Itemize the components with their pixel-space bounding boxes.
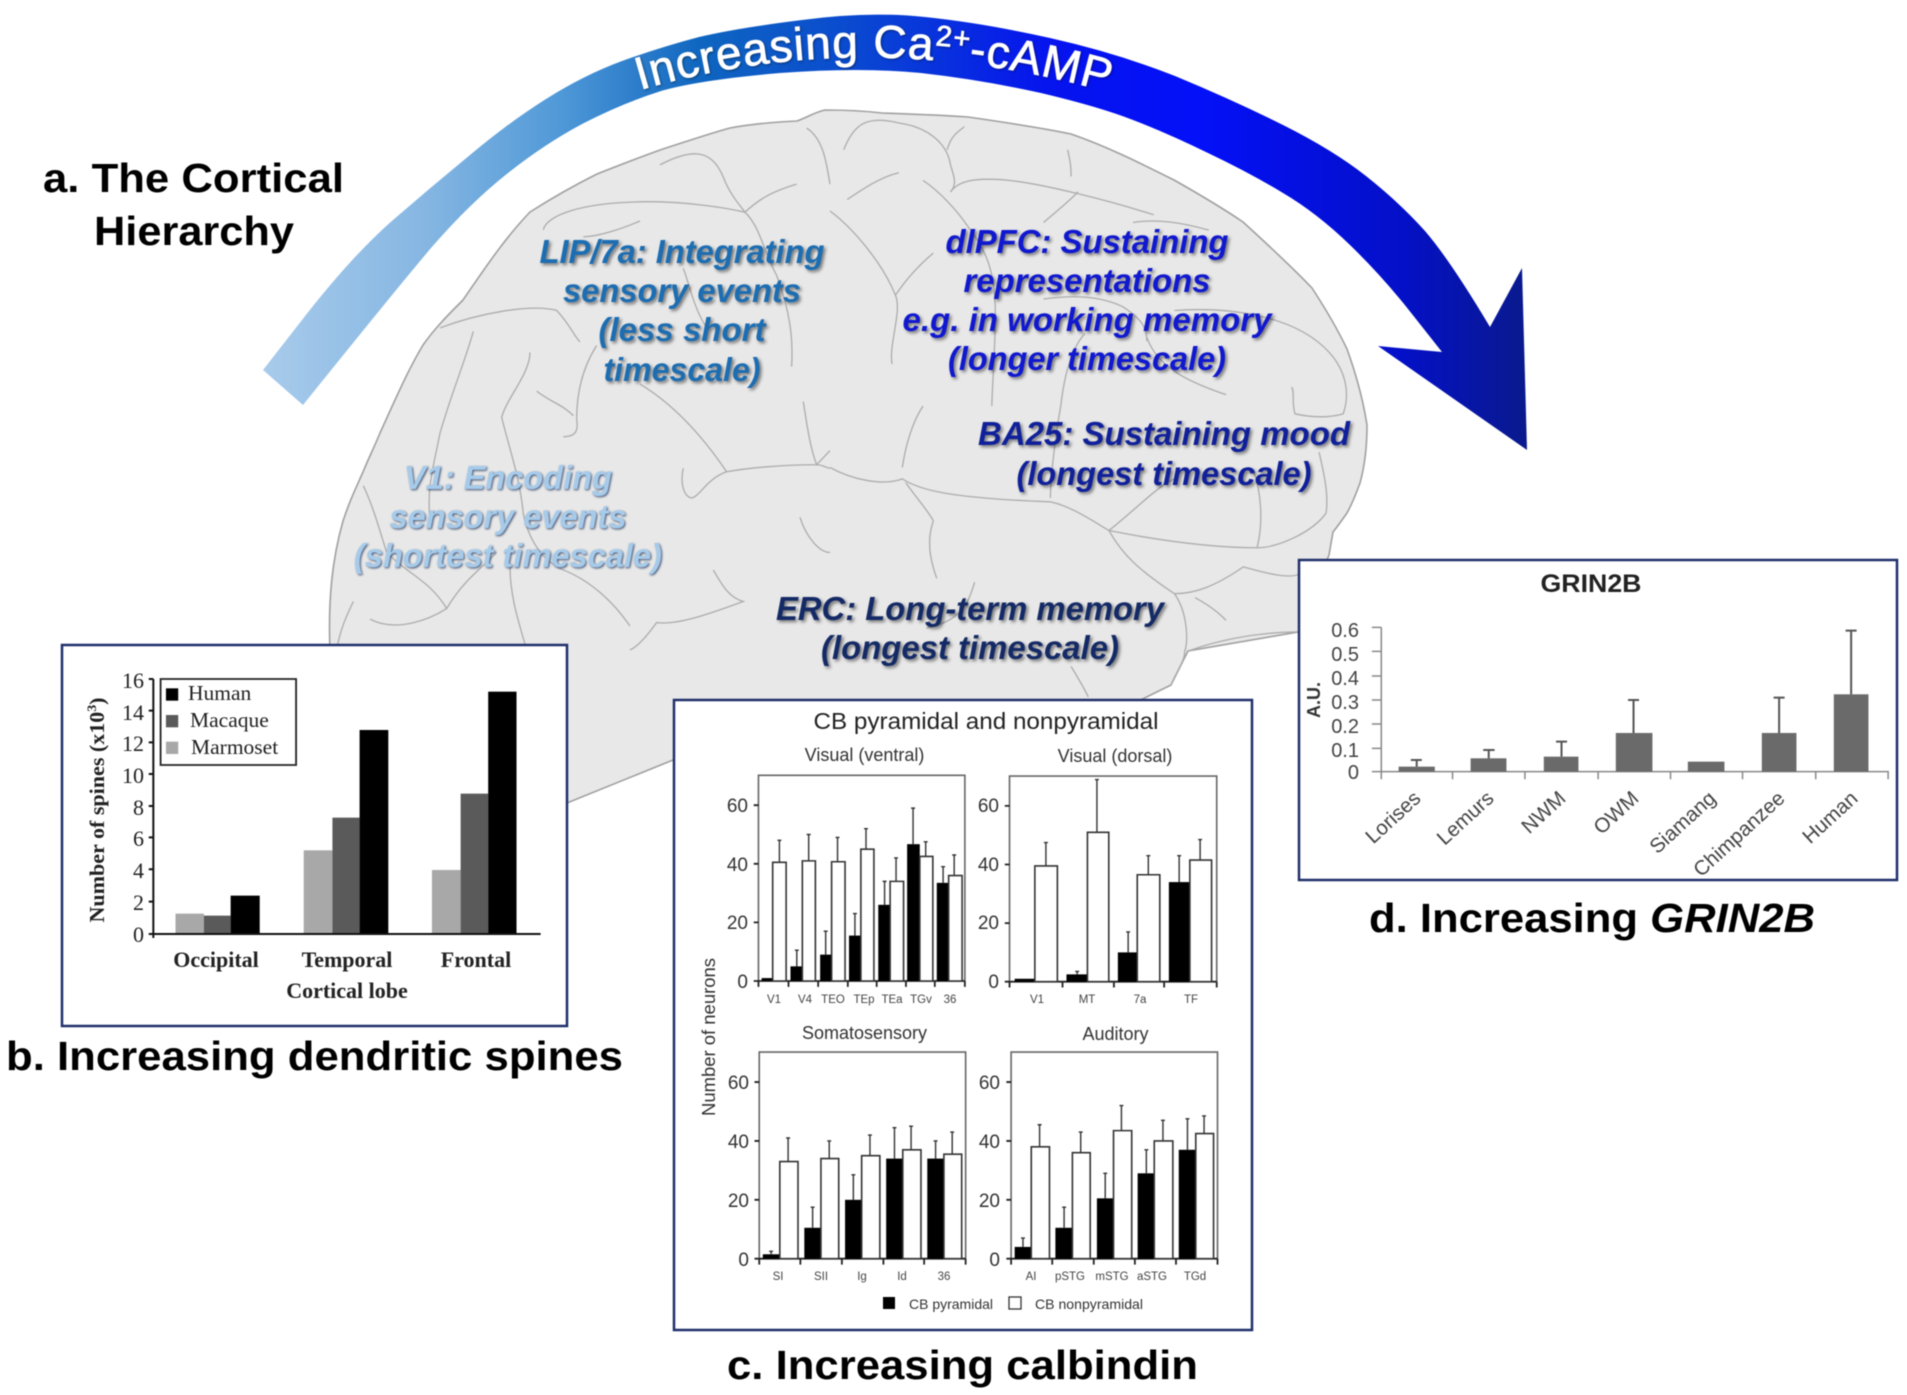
- heading a: Hierarchy: [94, 208, 294, 254]
- subplot: auditory: aSTG: [1137, 1271, 1167, 1283]
- legend and axis text: Human: [188, 681, 252, 705]
- legend and axis text: Number of spines (x10: [85, 722, 109, 922]
- legend and axis text: [84, 668, 511, 1003]
- brain label: dlPFC: dlPFC: Sustaining: [946, 223, 1228, 260]
- legend and axis text: 6: [133, 826, 144, 851]
- brain label: BA25: BA25: Sustaining mood: [978, 415, 1351, 452]
- subplot: auditory: 0: [989, 1250, 1000, 1271]
- y axis labels: 0.5: [1331, 644, 1359, 666]
- subplot: visual dorsal: TF: [1184, 994, 1198, 1006]
- legend and axis text: 12: [122, 731, 144, 756]
- subplot: visual dorsal: 7a: [1134, 994, 1147, 1006]
- y-axis title: Number of neurons: [699, 958, 719, 1116]
- category labels: Siamang: [1645, 787, 1720, 858]
- legend and axis text: Temporal: [302, 947, 392, 972]
- legend and axis text: Macaque: [190, 708, 269, 732]
- category labels: OWM: [1589, 787, 1643, 839]
- legend and axis text: 14: [122, 700, 144, 725]
- brain label: LIP/7a: timescale): [604, 351, 760, 388]
- legend: CB cell types: [883, 1296, 1143, 1312]
- panel b: dendritic spines chart: [62, 645, 567, 1026]
- legend and axis text: 10: [122, 763, 144, 788]
- bars with error bars: [1372, 627, 1889, 779]
- bars: spines per lobe and species: [149, 679, 541, 938]
- brain label: dlPFC: e.g. in working memory: [902, 301, 1273, 338]
- y axis labels: 0.6: [1331, 620, 1359, 642]
- legend and axis text: 4: [133, 858, 144, 883]
- brain label: V1: (shortest timescale): [354, 537, 662, 574]
- subplot: visual ventral: TEO: [821, 994, 845, 1006]
- brain sulci, anterior: [830, 120, 1346, 697]
- legend and axis text: ): [85, 698, 109, 705]
- subplot: visual ventral: V4: [798, 994, 813, 1006]
- heading c: c. Increasing calbindin: [727, 1342, 1198, 1388]
- category labels: Human: [1798, 787, 1862, 848]
- y axis labels: A.U.: [1304, 682, 1324, 718]
- brain label: ERC: ERC: Long-term memory: [776, 590, 1166, 627]
- subplot: somatosensory: Ig: [857, 1271, 867, 1283]
- brain label: LIP/7a: [540, 233, 824, 388]
- category labels: [1361, 787, 1862, 881]
- arrow label: Increasing Ca: [634, 24, 936, 92]
- legend: CB cell types: CB nonpyramidal: [1035, 1296, 1143, 1312]
- brain sulci, posterior: [337, 128, 830, 650]
- subplot: auditory: Auditory: [1082, 1024, 1149, 1044]
- legend and axis text: 2: [133, 890, 144, 915]
- subplot: somatosensory: SI: [773, 1271, 783, 1283]
- legend and axis text: 0: [133, 922, 144, 947]
- subplot: somatosensory: Id: [897, 1271, 907, 1283]
- subplot: visual ventral: 0: [737, 972, 748, 993]
- chart title: CB pyramidal and nonpyramidal: [814, 708, 1158, 734]
- subplot: visual ventral: TGv: [910, 994, 932, 1006]
- subplot: somatosensory: 0: [738, 1250, 749, 1271]
- brain label: dlPFC: (longer timescale): [948, 340, 1226, 377]
- subplot: visual dorsal: Visual (dorsal): [1058, 746, 1172, 766]
- heading d: d. Increasing GRIN2B: [1369, 895, 1815, 941]
- legend and axis text: Cortical lobe: [286, 978, 408, 1003]
- brain label: dlPFC: [902, 223, 1273, 377]
- brain label: dlPFC: representations: [964, 262, 1210, 299]
- panel c: calbindin charts: [674, 700, 1252, 1330]
- subplot: visual ventral: 40: [727, 855, 748, 876]
- legend and axis text: Occipital: [173, 947, 259, 972]
- arrow: increasing Ca2+-cAMP: [262, 14, 1528, 450]
- brain label: ERC: (longest timescale): [821, 629, 1119, 666]
- legend and axis text: 16: [122, 668, 144, 693]
- subplot: visual dorsal: 0: [988, 972, 999, 993]
- subplot: visual dorsal: [978, 746, 1217, 1006]
- subplot: visual ventral: V1: [767, 994, 781, 1006]
- heading a: [43, 155, 344, 254]
- subplot: auditory: [979, 1024, 1218, 1283]
- legend: CB cell types: CB pyramidal: [909, 1296, 993, 1312]
- subplot: visual ventral: Visual (ventral): [805, 745, 924, 765]
- arrow label: 2+: [935, 24, 972, 50]
- category labels: Lorises: [1361, 787, 1425, 848]
- brain label: LIP/7a: LIP/7a: Integrating: [540, 233, 824, 270]
- subplot: auditory: 20: [979, 1191, 1000, 1212]
- subplot: auditory: 60: [979, 1073, 1000, 1094]
- category labels: Lemurs: [1432, 787, 1498, 850]
- y axis labels: [1304, 620, 1359, 784]
- subplot: visual ventral: [727, 745, 965, 1006]
- subplot: visual ventral: 60: [727, 796, 748, 817]
- subplot: auditory: pSTG: [1055, 1271, 1085, 1283]
- legend and axis text: Marmoset: [191, 735, 278, 759]
- brain label: V1: [354, 459, 662, 574]
- subplot: somatosensory: 36: [938, 1271, 950, 1283]
- heading a: a. The Cortical: [43, 155, 344, 201]
- subplot: visual ventral: 36: [944, 994, 956, 1006]
- subplot: auditory: AI: [1026, 1271, 1036, 1283]
- subplot: visual ventral: TEp: [853, 994, 875, 1006]
- subplot: visual dorsal: 20: [978, 913, 999, 934]
- legend and axis text: Frontal: [441, 947, 511, 972]
- subplot: somatosensory: 40: [728, 1132, 749, 1153]
- subplot: visual ventral: TEa: [881, 994, 903, 1006]
- chart title: GRIN2B: [1540, 570, 1642, 598]
- brain label: V1: sensory events: [390, 498, 626, 535]
- brain label: LIP/7a: sensory events: [563, 272, 801, 309]
- subplot: auditory: 40: [979, 1132, 1000, 1153]
- legend and axis text: 3: [84, 704, 99, 712]
- y axis labels: 0.4: [1331, 668, 1359, 690]
- y axis labels: 0: [1348, 762, 1359, 784]
- category labels: Chimpanzee: [1689, 787, 1789, 881]
- heading b: b. Increasing dendritic spines: [6, 1033, 623, 1079]
- subplot: visual dorsal: 60: [978, 796, 999, 817]
- subplot: visual dorsal: MT: [1079, 994, 1095, 1006]
- subplot: somatosensory: Somatosensory: [802, 1023, 927, 1043]
- category labels: NWM: [1517, 787, 1570, 838]
- arrow label: -cAMP: [970, 40, 1114, 88]
- subplot: visual dorsal: V1: [1030, 994, 1044, 1006]
- subplot: somatosensory: SII: [814, 1271, 828, 1283]
- subplot: somatosensory: [728, 1023, 966, 1283]
- y axis labels: 0.1: [1331, 740, 1359, 762]
- brain label: BA25: [978, 415, 1351, 492]
- subplot: auditory: TGd: [1184, 1271, 1206, 1283]
- subplot: visual dorsal: 40: [978, 855, 999, 876]
- brain label: LIP/7a: (less short: [598, 311, 768, 348]
- y axis labels: 0.3: [1331, 692, 1359, 714]
- subplot: auditory: mSTG: [1095, 1271, 1129, 1283]
- panel d: GRIN2B chart: [1299, 560, 1897, 881]
- subplot: somatosensory: 60: [728, 1073, 749, 1094]
- subplot: somatosensory: 20: [728, 1191, 749, 1212]
- brain illustration: [320, 110, 1367, 830]
- y axis labels: 0.2: [1331, 716, 1359, 738]
- legend and axis text: 8: [133, 795, 144, 820]
- subplot: visual ventral: 20: [727, 913, 748, 934]
- brain label: V1: V1: Encoding: [404, 459, 612, 496]
- brain label: BA25: (longest timescale): [1016, 455, 1312, 492]
- brain label: ERC: [776, 590, 1166, 666]
